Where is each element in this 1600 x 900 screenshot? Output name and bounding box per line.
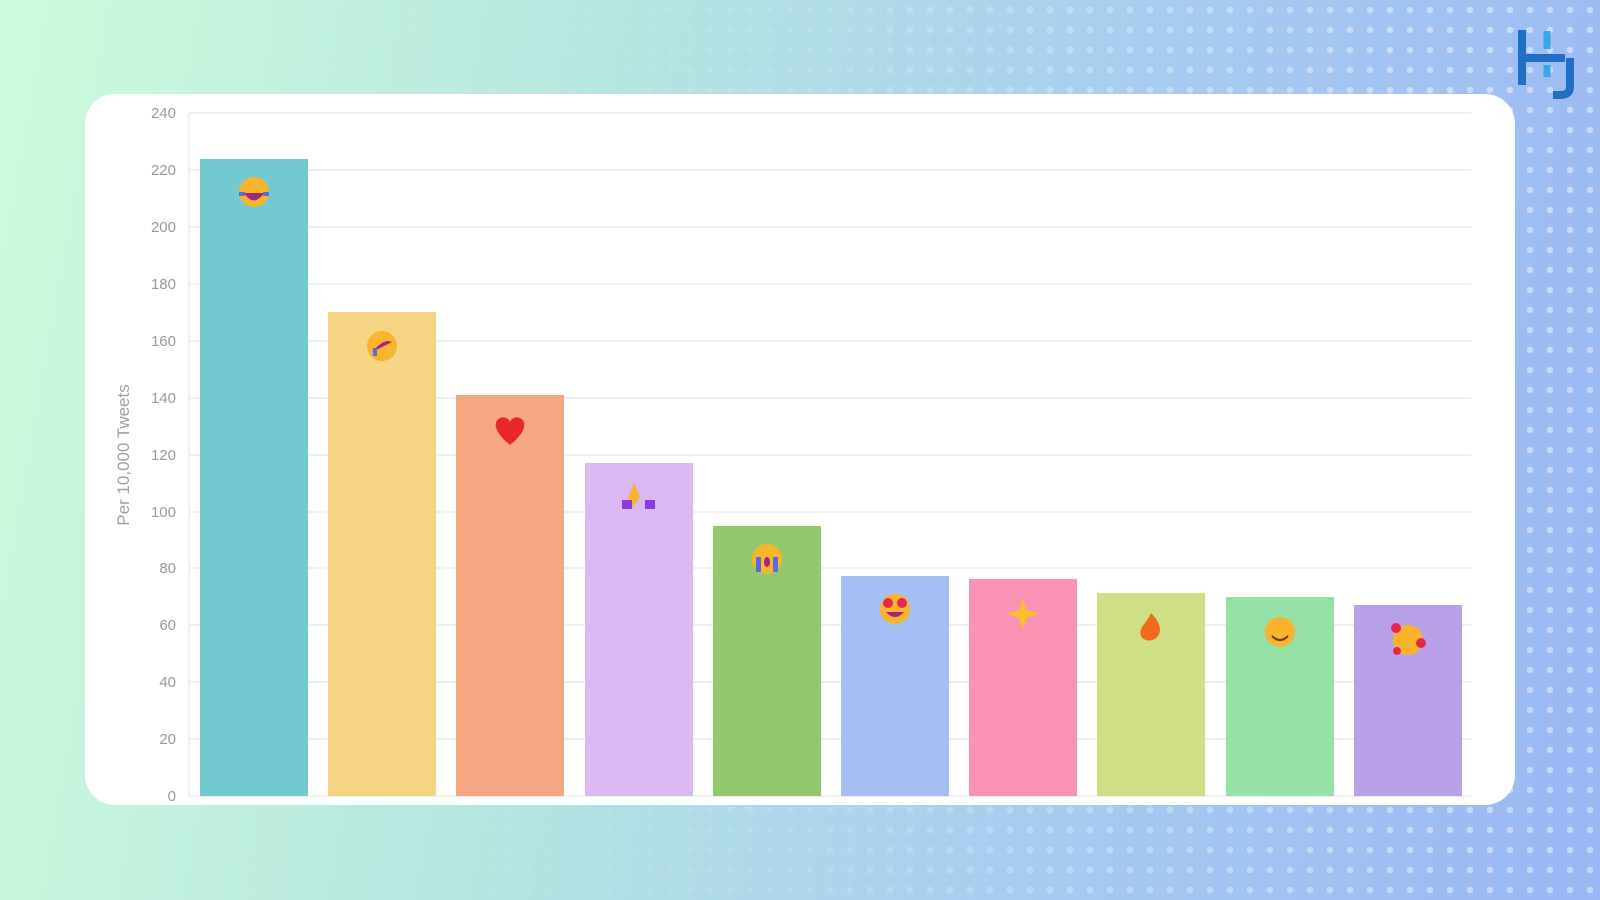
y axis labels: 60 <box>159 617 176 634</box>
y axis labels: 220 <box>151 162 176 179</box>
y axis labels: 180 <box>151 276 176 293</box>
y axis labels: 0 <box>168 788 176 805</box>
y axis labels: 120 <box>151 447 176 464</box>
y axis labels: 240 <box>151 105 176 122</box>
bars <box>200 159 1462 796</box>
logo <box>1518 30 1574 99</box>
y axis labels: 100 <box>151 504 176 521</box>
y axis labels: 80 <box>159 560 176 577</box>
y axis labels <box>151 105 176 805</box>
y axis labels: 140 <box>151 390 176 407</box>
chart card <box>85 94 1515 805</box>
emoji icons <box>239 177 1426 655</box>
y axis title: Per 10,000 Tweets <box>114 384 133 526</box>
y axis labels: 200 <box>151 219 176 236</box>
y axis labels: 20 <box>159 731 176 748</box>
y axis labels: 40 <box>159 674 176 691</box>
y axis labels: 160 <box>151 333 176 350</box>
